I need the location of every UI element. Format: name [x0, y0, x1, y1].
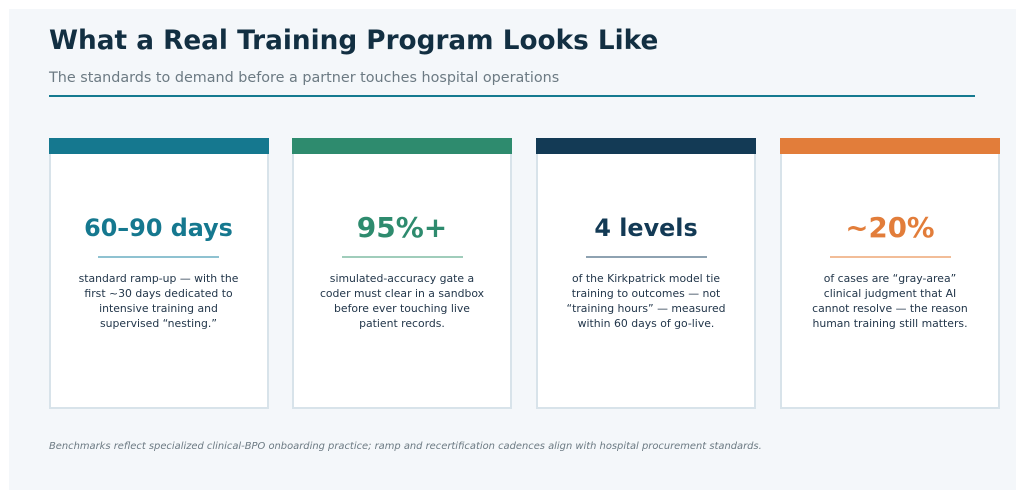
description: accuracy: coder must clear in a sandbox	[320, 287, 484, 300]
description: Kirkpatrick: within 60 days of go-live.	[578, 317, 714, 330]
stat rule: orange	[830, 256, 951, 258]
stat: 95%+: 95%+	[357, 210, 447, 244]
description: Kirkpatrick: “training hours” — measured	[566, 302, 726, 315]
stat rule: green	[342, 256, 463, 258]
panel: accuracy card	[292, 138, 512, 409]
description: accuracy: patient records.	[359, 317, 445, 330]
stat: ~20%: ~20%	[845, 210, 935, 244]
stat: 60–90 days: 60–90 days	[84, 214, 233, 242]
subtitle: The standards to demand before a partner touches hospital operations	[49, 70, 559, 86]
description: gray-area: of cases are “gray-area”	[824, 272, 956, 284]
description: gray-area: clinical judgment that AI	[824, 287, 956, 300]
stat: 4 levels: 4 levels	[594, 214, 698, 242]
description: gray-area: cannot resolve — the reason	[812, 302, 968, 315]
stat rule: teal	[98, 256, 219, 258]
title: What a Real Training Program Looks Like	[49, 26, 658, 56]
card header bar: green	[292, 138, 512, 154]
description: ramp-up: intensive training and	[99, 302, 218, 315]
footnote: Benchmarks reflect specialized clinical-BPO onboarding practice; ramp and recertification cadences align with hospital procurement standards.	[49, 441, 762, 452]
stat rule: navy	[586, 256, 707, 258]
description: Kirkpatrick: of the Kirkpatrick model tie	[572, 272, 720, 284]
description: accuracy: simulated-accuracy gate a	[330, 272, 474, 284]
description: Kirkpatrick: training to outcomes — not	[572, 287, 720, 300]
card header bar: teal	[48, 138, 269, 154]
description: gray-area: human training still matters.	[812, 317, 968, 330]
description: accuracy: before ever touching live	[334, 302, 470, 315]
description: accuracy	[320, 272, 484, 330]
card header bar: orange	[780, 138, 1000, 154]
card header bar: navy	[536, 138, 756, 154]
panel: gray-area card	[780, 138, 1000, 409]
description: gray-area	[812, 272, 968, 330]
panel: Kirkpatrick card	[536, 138, 756, 409]
description: ramp-up: supervised “nesting.”	[100, 317, 217, 330]
header rule	[49, 95, 975, 97]
description: ramp-up	[79, 272, 238, 330]
description: ramp-up: standard ramp-up — with the	[79, 272, 238, 284]
description: ramp-up: first ~30 days dedicated to	[84, 287, 233, 300]
description: Kirkpatrick	[566, 272, 726, 330]
panel: ramp-up card	[48, 138, 269, 409]
